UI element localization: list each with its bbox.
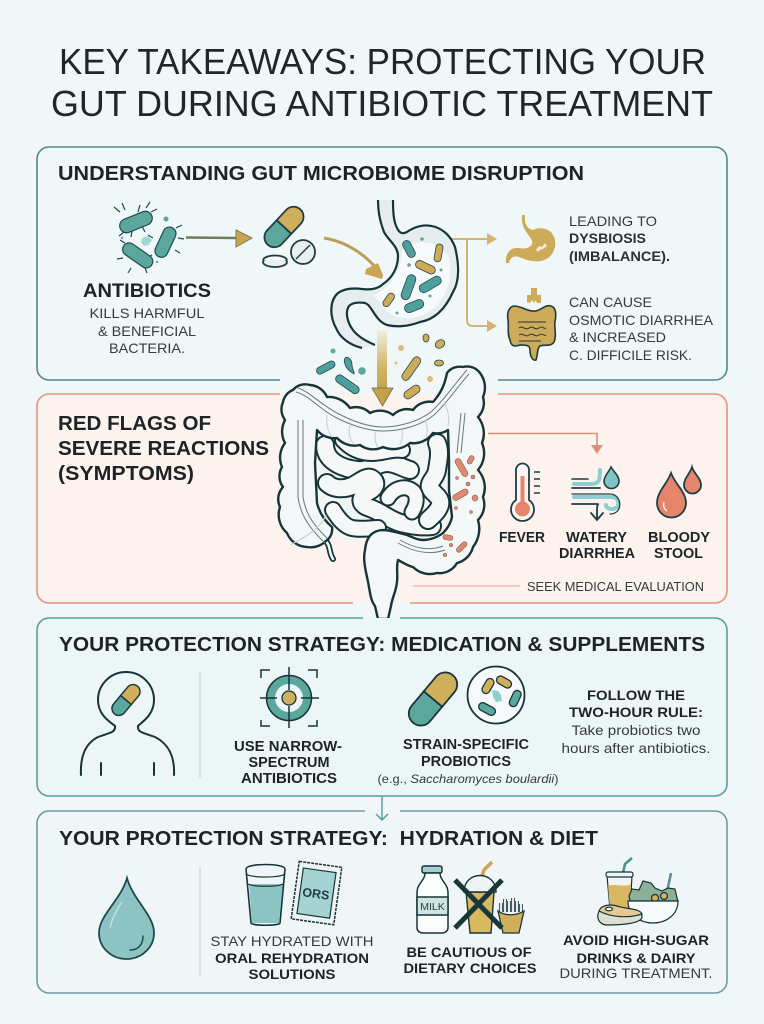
text: antibiotics bbox=[83, 281, 211, 356]
heading: medication: YOUR PROTECTION STRATEGY: MEDICATION & SUPPLEMENTS bbox=[59, 633, 705, 656]
label: probiotics bbox=[378, 737, 558, 786]
falling bacteria bbox=[315, 334, 446, 400]
panel: hydration and diet bbox=[37, 811, 727, 993]
title bbox=[51, 41, 713, 124]
arrow: bacteria to antibiotics bbox=[186, 230, 252, 247]
icon: water drop bbox=[99, 878, 154, 959]
label: oral rehydration: STAY HYDRATED WITH bbox=[210, 933, 374, 949]
heading: understanding: UNDERSTANDING GUT MICROBIOME DISRUPTION bbox=[58, 162, 584, 185]
text: two-hour rule: Take probiotics two bbox=[572, 722, 701, 738]
title: GUT DURING ANTIBIOTIC TREATMENT bbox=[51, 83, 713, 124]
text: antibiotics: KILLS HARMFUL bbox=[90, 305, 205, 321]
heading: red flags bbox=[58, 412, 269, 485]
arrow: gut to symptoms bbox=[488, 434, 603, 454]
text: diarrhea risk: & INCREASED bbox=[569, 329, 666, 345]
text: two-hour rule: hours after antibiotics. bbox=[562, 740, 710, 756]
title: KEY TAKEAWAYS: PROTECTING YOUR bbox=[59, 41, 706, 82]
large intestine and rectum bbox=[278, 366, 485, 619]
label: bloody stool: STOOL bbox=[654, 546, 703, 562]
icon: ORS sachet bbox=[291, 861, 342, 925]
illustration: stomach and intestines bbox=[278, 200, 485, 619]
label: high-sugar: AVOID HIGH-SUGAR bbox=[563, 932, 709, 948]
stomach bbox=[331, 200, 458, 348]
text: antibiotics: & BENEFICIAL bbox=[98, 323, 196, 339]
icon: gold intestines bbox=[508, 288, 556, 360]
seek medical evaluation line: SEEK MEDICAL EVALUATION bbox=[527, 579, 704, 594]
icon: milk bottle bbox=[417, 866, 448, 933]
appendix bbox=[322, 538, 333, 559]
heading: hydration: YOUR PROTECTION STRATEGY: HYDRATION & DIET bbox=[59, 827, 598, 850]
icon: bacteria bbox=[114, 202, 184, 273]
label: dietary choices: DIETARY CHOICES bbox=[404, 960, 536, 976]
colon haustra shading bbox=[290, 402, 449, 545]
label: narrow spectrum: SPECTRUM bbox=[248, 755, 330, 771]
label: fever: FEVER bbox=[499, 530, 546, 546]
divider bbox=[199, 672, 201, 778]
label: oral rehydration bbox=[210, 933, 374, 982]
icon: crossed-out soda and fries bbox=[455, 862, 524, 933]
divider bbox=[199, 868, 201, 975]
text: dysbiosis: (IMBALANCE). bbox=[569, 248, 670, 264]
icon: glass of water bbox=[246, 864, 285, 925]
arrows: stomach to effects bbox=[432, 233, 497, 332]
icon: capsule bbox=[404, 668, 462, 730]
icon: milk bottle: MILK bbox=[420, 901, 445, 913]
icon: target bbox=[260, 667, 319, 728]
icon: capsule and tablets bbox=[260, 203, 315, 267]
label: high-sugar bbox=[560, 932, 712, 981]
arrow: antibiotics to stomach bbox=[324, 238, 383, 279]
text: antibiotics: ANTIBIOTICS bbox=[83, 281, 211, 302]
label: narrow spectrum bbox=[234, 739, 342, 787]
label: watery diarrhea: WATERY bbox=[566, 530, 627, 546]
heading: red flags: SEVERE REACTIONS bbox=[58, 437, 269, 460]
stomach bacteria bbox=[382, 237, 444, 314]
text: antibiotics: BACTERIA. bbox=[109, 340, 185, 356]
label: bloody stool bbox=[648, 530, 710, 562]
heading: red flags: RED FLAGS OF bbox=[58, 412, 211, 435]
label: probiotics: (e.g., Saccharomyces boulardii ) bbox=[378, 772, 558, 786]
label: dietary choices bbox=[404, 944, 536, 976]
text: diarrhea risk: OSMOTIC DIARRHEA bbox=[569, 312, 714, 328]
icon: gold stomach bbox=[506, 215, 555, 263]
text: dysbiosis bbox=[569, 213, 670, 264]
label: watery diarrhea bbox=[559, 530, 636, 562]
icon: sugary drink, salad bowl and steak bbox=[598, 858, 678, 925]
label: probiotics: STRAIN-SPECIFIC bbox=[403, 737, 530, 753]
harmful bacteria in colon bbox=[443, 455, 478, 557]
panel: medication and supplements bbox=[37, 618, 727, 796]
text: dysbiosis: LEADING TO bbox=[569, 213, 657, 229]
text: two-hour rule: FOLLOW THE bbox=[587, 687, 685, 703]
text: two-hour rule: TWO-HOUR RULE: bbox=[569, 704, 703, 720]
icon: ORS sachet: ORS bbox=[301, 885, 330, 903]
arrow: stomach to intestine bbox=[372, 330, 393, 406]
panel: red flags bbox=[37, 394, 727, 603]
icon: thermometer bbox=[511, 464, 540, 521]
arrow: connector between strategies bbox=[376, 796, 388, 820]
text: two-hour rule bbox=[562, 687, 710, 756]
label: dietary choices: BE CAUTIOUS OF bbox=[406, 944, 532, 960]
icon: watery wind bbox=[572, 467, 620, 520]
label: bloody stool: BLOODY bbox=[648, 530, 710, 546]
icon: probiotic dish bbox=[468, 666, 524, 724]
text: dysbiosis: DYSBIOSIS bbox=[569, 230, 646, 246]
colon inner lines bbox=[296, 370, 469, 553]
label: probiotics: PROBIOTICS bbox=[421, 754, 511, 770]
label: oral rehydration: SOLUTIONS bbox=[248, 966, 336, 982]
icon: blood drops bbox=[657, 467, 701, 518]
label: high-sugar: DRINKS & DAIRY bbox=[576, 950, 696, 966]
heading: red flags: (SYMPTOMS) bbox=[58, 462, 194, 485]
label: oral rehydration: ORAL REHYDRATION bbox=[215, 950, 369, 966]
icon: person with capsule bbox=[81, 672, 174, 775]
label: high-sugar: DURING TREATMENT. bbox=[560, 965, 712, 981]
label: narrow spectrum: USE NARROW- bbox=[234, 739, 342, 755]
label: watery diarrhea: DIARRHEA bbox=[559, 546, 636, 562]
small intestine bbox=[318, 432, 450, 540]
text: diarrhea risk: CAN CAUSE bbox=[569, 294, 652, 310]
text: diarrhea risk: C. DIFFICILE RISK. bbox=[569, 347, 692, 363]
panel: understanding gut microbiome disruption bbox=[37, 147, 727, 380]
text: diarrhea risk bbox=[569, 294, 714, 363]
label: narrow spectrum: ANTIBIOTICS bbox=[241, 771, 337, 787]
